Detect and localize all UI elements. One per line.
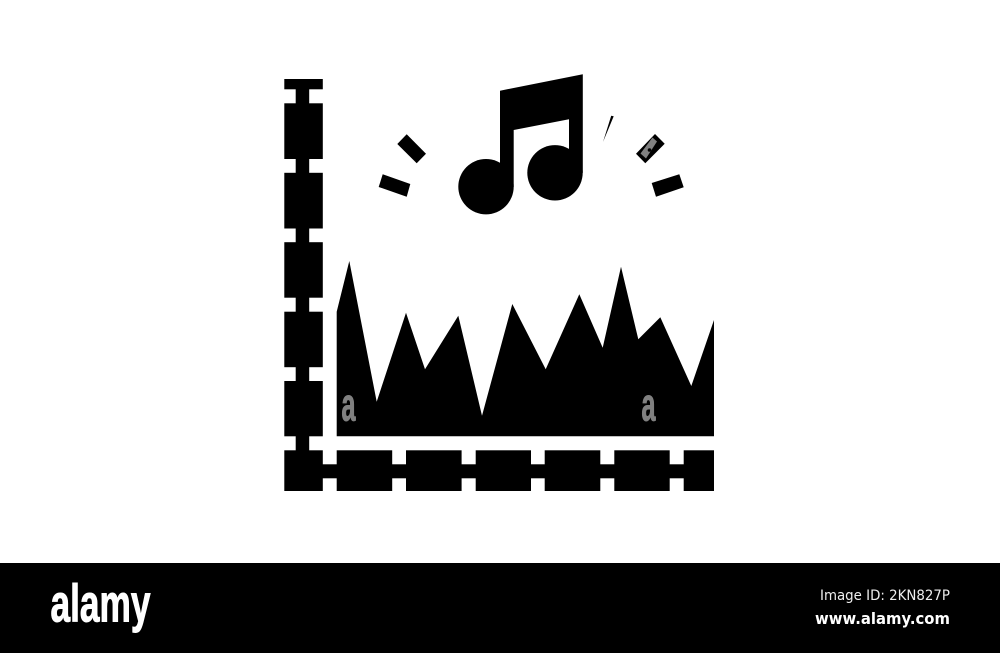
footer logo wordmark: alamy	[50, 574, 151, 634]
sound tick: lower left	[379, 174, 410, 197]
sound tick: upper right with watermark	[636, 134, 665, 163]
vertical axis: dashed block column	[284, 79, 323, 465]
horizontal axis: dashed block row	[284, 450, 714, 491]
sound tick: sliver near note	[603, 116, 614, 142]
website address: www.alamy.com	[815, 609, 950, 628]
footer bar	[0, 563, 1000, 653]
icon: music note	[458, 74, 583, 214]
watermark letter on waveform, left: a	[342, 378, 356, 430]
watermark letter on waveform, right: a	[642, 378, 656, 430]
sound waveform area chart	[337, 261, 714, 436]
sound tick: upper left	[397, 134, 426, 163]
sound tick: lower right	[652, 174, 684, 197]
image id: Image ID: 2KN827P	[820, 588, 950, 604]
